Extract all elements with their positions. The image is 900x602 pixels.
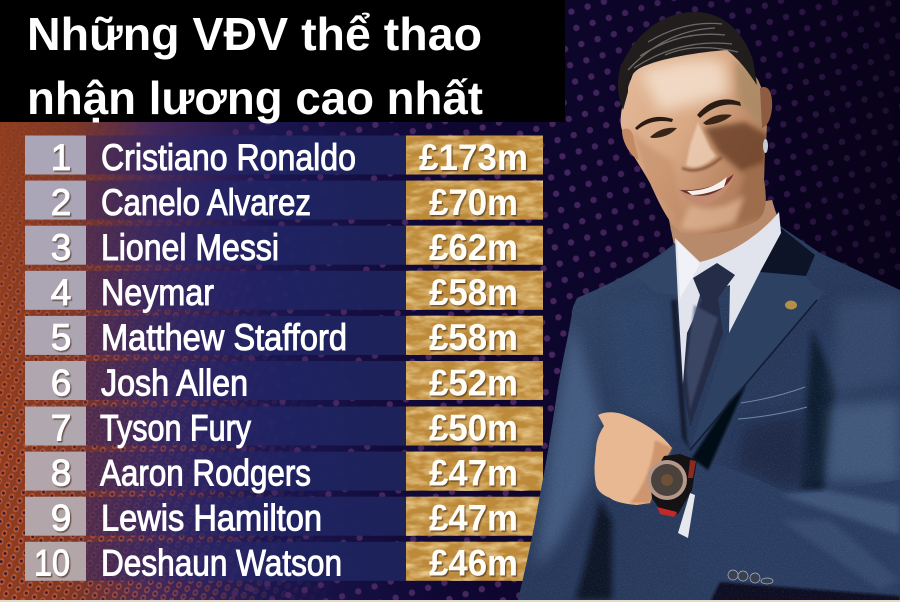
row 4: 4 — [51, 272, 71, 313]
title: Những VĐV thể thao — [27, 8, 482, 60]
row 9: 9 — [51, 498, 71, 538]
panel: ranking table — [25, 136, 543, 584]
pocket — [738, 387, 807, 419]
title: nhận lương cao nhất — [27, 72, 483, 124]
row 5: Matthew Stafford — [101, 317, 347, 358]
row 2: £70m — [429, 182, 518, 223]
ears — [622, 128, 639, 160]
nose — [686, 122, 716, 167]
row 3: 3 — [51, 227, 71, 268]
hair — [618, 12, 757, 110]
row 1: Cristiano Ronaldo — [101, 137, 356, 178]
row 4: £58m — [429, 272, 518, 313]
row 3 — [25, 226, 543, 268]
row 5: £58m — [429, 317, 518, 358]
row 7 — [25, 406, 543, 448]
row 10 — [25, 542, 543, 584]
row 10: 10 — [34, 542, 70, 584]
row 1: £173m — [419, 137, 528, 178]
row 9: Lewis Hamilton — [101, 498, 322, 538]
left lapel — [671, 300, 690, 450]
suit jacket — [518, 226, 900, 602]
jacket collar — [758, 228, 815, 280]
row 2: Canelo Alvarez — [101, 182, 311, 223]
right lapel — [690, 272, 825, 450]
row 10: Deshaun Watson — [101, 542, 342, 584]
row 7: 7 — [51, 408, 71, 448]
row 8: £47m — [429, 452, 518, 494]
earring — [763, 139, 768, 153]
row 8: Aaron Rodgers — [100, 452, 311, 494]
row 2 — [25, 181, 543, 223]
row 7: Tyson Fury — [100, 408, 251, 448]
row 6 — [25, 361, 543, 404]
row 5: 5 — [51, 317, 71, 358]
shirt collar — [675, 212, 781, 385]
eyes — [650, 128, 677, 138]
row 1 — [25, 136, 543, 178]
shirt cuff — [678, 493, 695, 538]
row 3: Lionel Messi — [101, 227, 279, 268]
row 9 — [25, 497, 543, 538]
mouth and teeth — [678, 173, 735, 204]
row 7: £50m — [429, 408, 518, 448]
row 4 — [25, 271, 543, 313]
neck — [668, 200, 782, 282]
row 9: £47m — [429, 498, 518, 538]
row 4: Neymar — [101, 272, 214, 313]
hand — [594, 412, 672, 505]
row 6: 6 — [51, 362, 71, 404]
row 8 — [25, 452, 543, 494]
face — [621, 40, 772, 234]
row 6: Josh Allen — [101, 362, 248, 404]
sleeve buttons — [728, 570, 773, 584]
wristwatch — [647, 454, 697, 517]
row 5 — [25, 316, 543, 358]
eyebrows — [635, 117, 673, 130]
lapel pin — [785, 300, 797, 310]
row 10: £46m — [429, 542, 518, 584]
row 3: £62m — [429, 227, 518, 268]
portrait: footballer in blue suit — [518, 12, 900, 602]
row 6: £52m — [429, 362, 518, 404]
row 1: 1 — [51, 137, 71, 178]
tie — [683, 263, 735, 427]
title — [0, 0, 565, 124]
row 2: 2 — [51, 182, 71, 223]
row 8: 8 — [51, 452, 71, 494]
